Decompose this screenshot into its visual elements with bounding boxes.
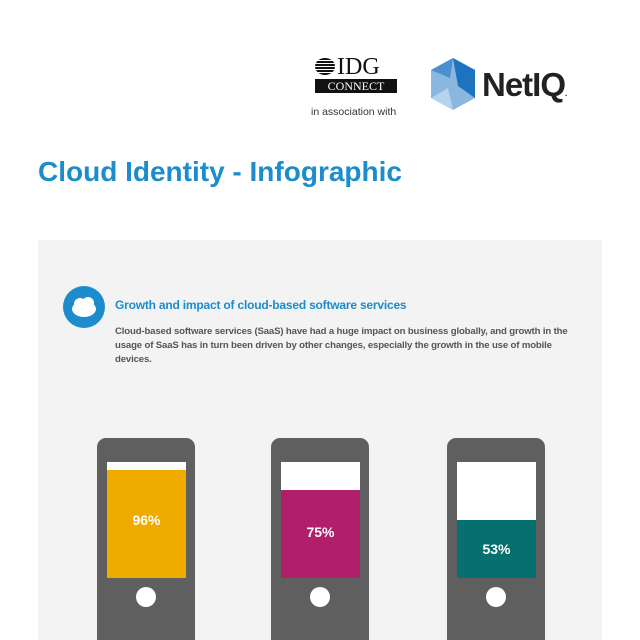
panel: growth: [38, 240, 602, 640]
IDG text: IDG: [337, 54, 380, 80]
CONNECT text: [315, 79, 397, 93]
phone 96%: 96%: [132, 512, 161, 528]
section heading: Growth and impact of cloud-based software services: [115, 298, 406, 312]
body text: Cloud-based software services (SaaS) have had a huge impact on business globally, and growth in the usage of SaaS has in turn been driven by other changes, especially the growth in the use of mobile devices.: [115, 326, 568, 365]
phone 75%: 75%: [306, 524, 335, 540]
logo: IDG Connect: [315, 54, 397, 93]
phone 53%: 53%: [482, 541, 511, 557]
IDG globe icon: [315, 58, 335, 75]
phone 96%: [97, 438, 195, 640]
icon: cloud: [63, 286, 105, 328]
CONNECT text: CONNECT: [328, 79, 384, 93]
NetIQ hexagon icon: [431, 58, 475, 110]
logo: NetIQ: [431, 58, 567, 110]
phone 75%: [271, 438, 369, 640]
association text: in association with: [311, 106, 396, 118]
title: Cloud Identity - Infographic: [38, 156, 402, 187]
phone 53%: [447, 438, 545, 640]
NetIQ text: NetIQ.: [482, 66, 566, 103]
